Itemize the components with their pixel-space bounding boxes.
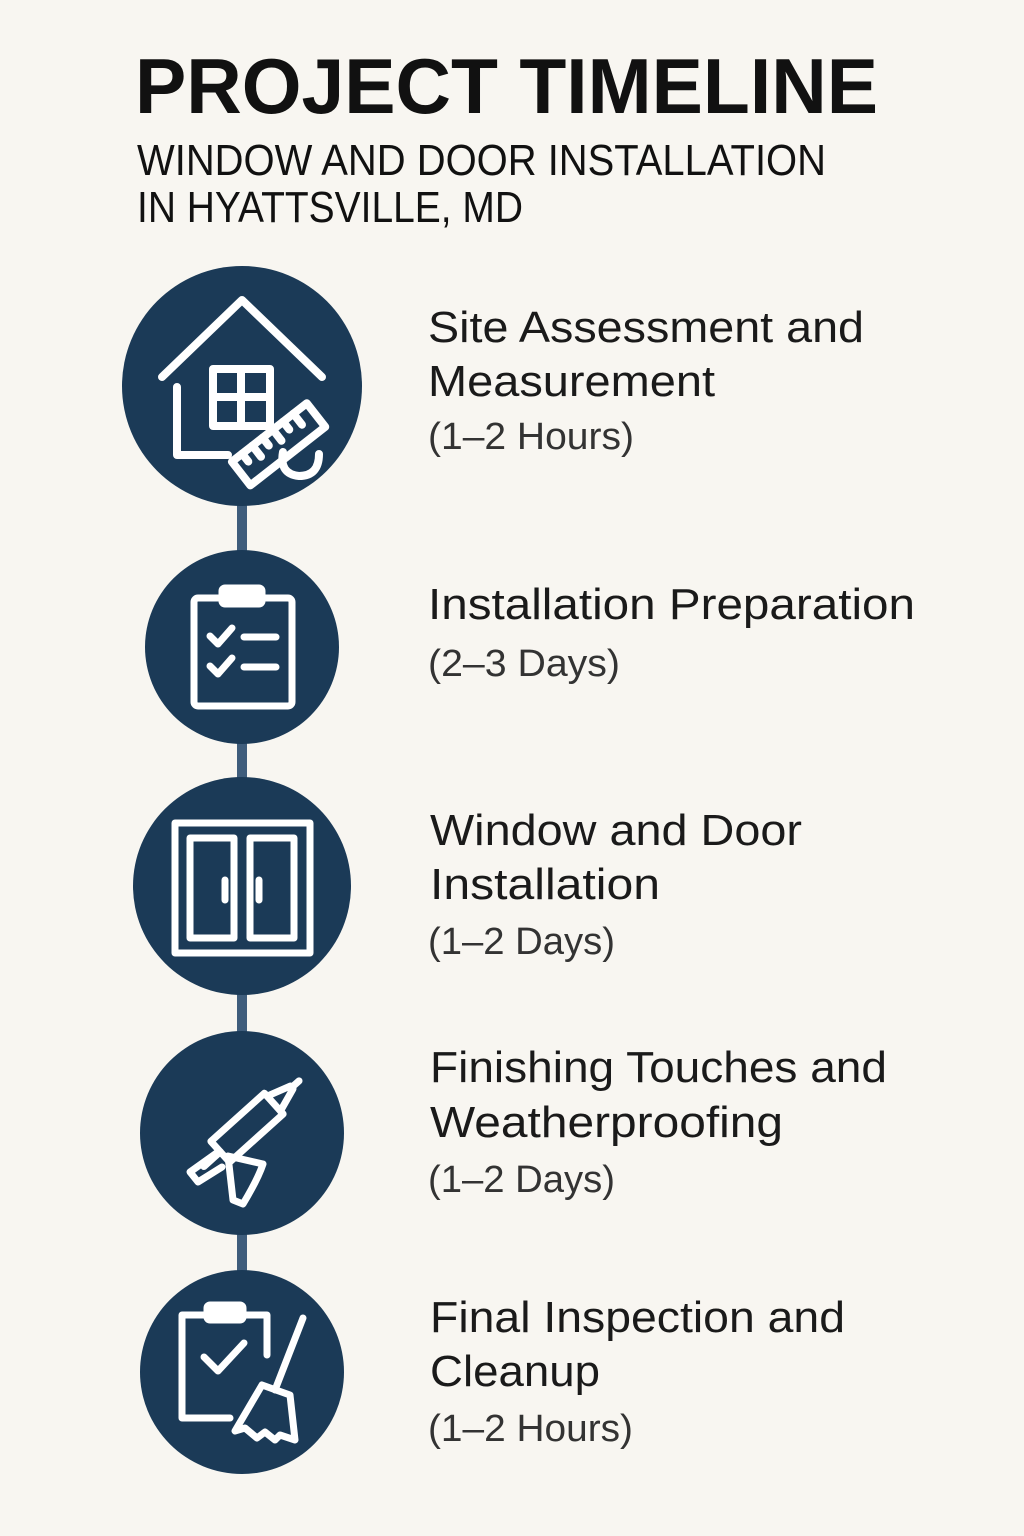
icon: double door (133, 777, 351, 995)
step 2 text (428, 580, 915, 685)
subtitle (137, 136, 826, 232)
step 5 text: Cleanup (430, 1347, 600, 1396)
step 5 text (428, 1293, 845, 1450)
step 4: finishing touches (140, 1031, 887, 1235)
step 4 text (428, 1043, 887, 1201)
step 3 text: Window and Door (430, 806, 802, 855)
timeline connector (237, 490, 247, 1290)
step 2 text: (2–3 Days) (428, 643, 620, 685)
step 2 text: Installation Preparation (428, 580, 915, 629)
step 4 text: (1–2 Days) (428, 1159, 615, 1201)
icon: caulk gun (140, 1031, 344, 1235)
icon: house with ruler (122, 266, 362, 506)
step 5: final inspection (140, 1270, 845, 1474)
step 1 text (428, 303, 864, 458)
step 3: window and door installation (133, 777, 802, 995)
subtitle: IN HYATTSVILLE, MD (137, 183, 523, 232)
subtitle: WINDOW AND DOOR INSTALLATION (137, 136, 826, 185)
title: PROJECT TIMELINE (135, 42, 878, 130)
step 5 text: Final Inspection and (430, 1293, 845, 1342)
step 5 text: (1–2 Hours) (428, 1408, 633, 1450)
icon: clipboard and broom (140, 1270, 344, 1474)
step 2: installation preparation (145, 550, 915, 744)
step 3 text: (1–2 Days) (428, 921, 615, 963)
step 3 text (428, 806, 802, 963)
step 4 text: Finishing Touches and (430, 1043, 887, 1092)
step 4 text: Weatherproofing (430, 1098, 783, 1147)
step 1 text: Site Assessment and (428, 303, 864, 352)
icon: checklist clipboard (145, 550, 339, 744)
step 1 text: (1–2 Hours) (428, 416, 634, 458)
step 1 text: Measurement (428, 357, 715, 406)
step 1: site assessment (122, 266, 864, 506)
step 3 text: Installation (430, 860, 660, 909)
